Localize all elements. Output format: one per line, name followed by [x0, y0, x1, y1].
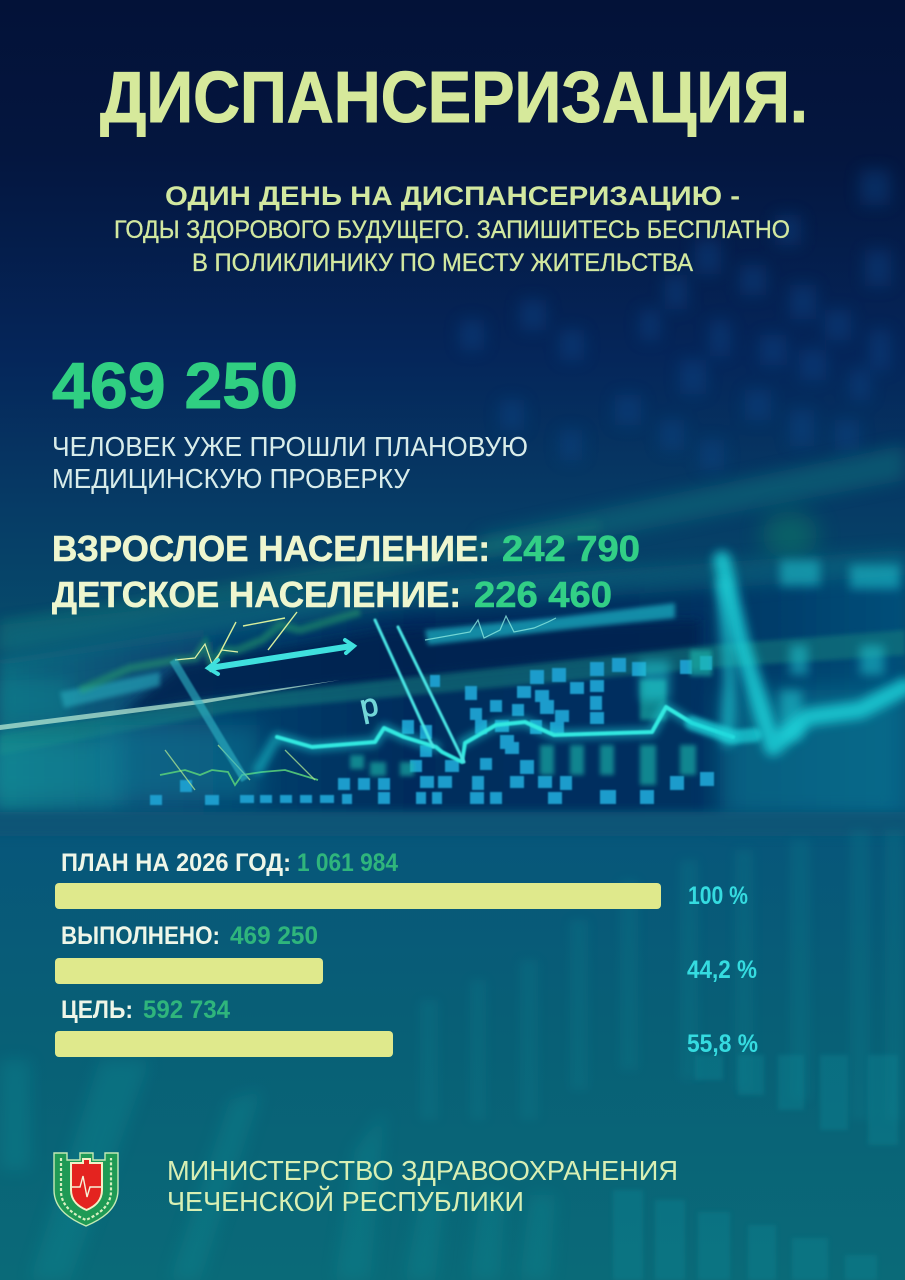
bar: done: 469 250: [230, 922, 318, 950]
headline description: МЕДИЦИНСКУЮ ПРОВЕРКУ: [52, 463, 410, 494]
bar chart: [55, 849, 758, 1058]
central dark ecg panel: [0, 555, 905, 815]
bar: done: [55, 922, 757, 984]
arrow: [208, 640, 354, 674]
population breakdown: [52, 528, 640, 615]
long light streak: [0, 680, 340, 730]
title: ДИСПАНСЕРИЗАЦИЯ.: [100, 58, 808, 138]
headline number: 469 250: [52, 349, 298, 422]
bar: done: 44,2 %: [687, 956, 757, 984]
bar: plan: 100 %: [688, 882, 748, 910]
light green band: [0, 630, 905, 755]
population breakdown: ДЕТСКОЕ НАСЕЛЕНИЕ:: [52, 574, 461, 615]
subtitle: [114, 181, 790, 277]
bar: done: ВЫПОЛНЕНО:: [61, 922, 220, 950]
bar: goal: ЦЕЛЬ:: [61, 996, 133, 1024]
bar: plan: [55, 849, 748, 910]
bar: goal: [55, 996, 758, 1058]
icon: ministry emblem: [54, 1153, 118, 1226]
green diagonal band: [480, 445, 905, 560]
diagonal blurred line left: [173, 660, 245, 780]
footer ministry name: ЧЕЧЕНСКОЙ РЕСПУБЛИКИ: [167, 1186, 524, 1217]
bar: goal: 55,8 %: [687, 1030, 758, 1058]
population breakdown: 226 460: [474, 574, 612, 615]
top right teal blurred band: [425, 603, 675, 645]
headline description: [52, 431, 528, 494]
subtitle: ОДИН ДЕНЬ НА ДИСПАНСЕРИЗАЦИЮ -: [165, 181, 740, 211]
dark band under the arrow: [120, 620, 700, 715]
subtitle: В ПОЛИКЛИНИКУ ПО МЕСТУ ЖИТЕЛЬСТВА: [192, 249, 693, 277]
data squares: [150, 656, 714, 805]
letter p: p: [356, 686, 381, 725]
bar: plan: ПЛАН НА 2026 ГОД:: [61, 849, 291, 877]
headline description: ЧЕЛОВЕК УЖЕ ПРОШЛИ ПЛАНОВУЮ: [52, 431, 528, 462]
thin mini ecg: [425, 616, 556, 640]
bar: plan: 1 061 984: [297, 849, 398, 877]
population breakdown: 242 790: [502, 528, 640, 569]
footer ministry name: МИНИСТЕРСТВО ЗДРАВООХРАНЕНИЯ: [167, 1155, 678, 1186]
bar: goal: 592 734: [143, 996, 230, 1024]
lower vertical streaks: [420, 830, 903, 1120]
population breakdown: ВЗРОСЛОЕ НАСЕЛЕНИЕ:: [52, 528, 490, 569]
subtitle: ГОДЫ ЗДОРОВОГО БУДУЩЕГО. ЗАПИШИТЕСЬ БЕСПЛАТНО: [114, 216, 790, 244]
main ecg: [258, 560, 905, 770]
footer ministry name: [167, 1155, 678, 1217]
